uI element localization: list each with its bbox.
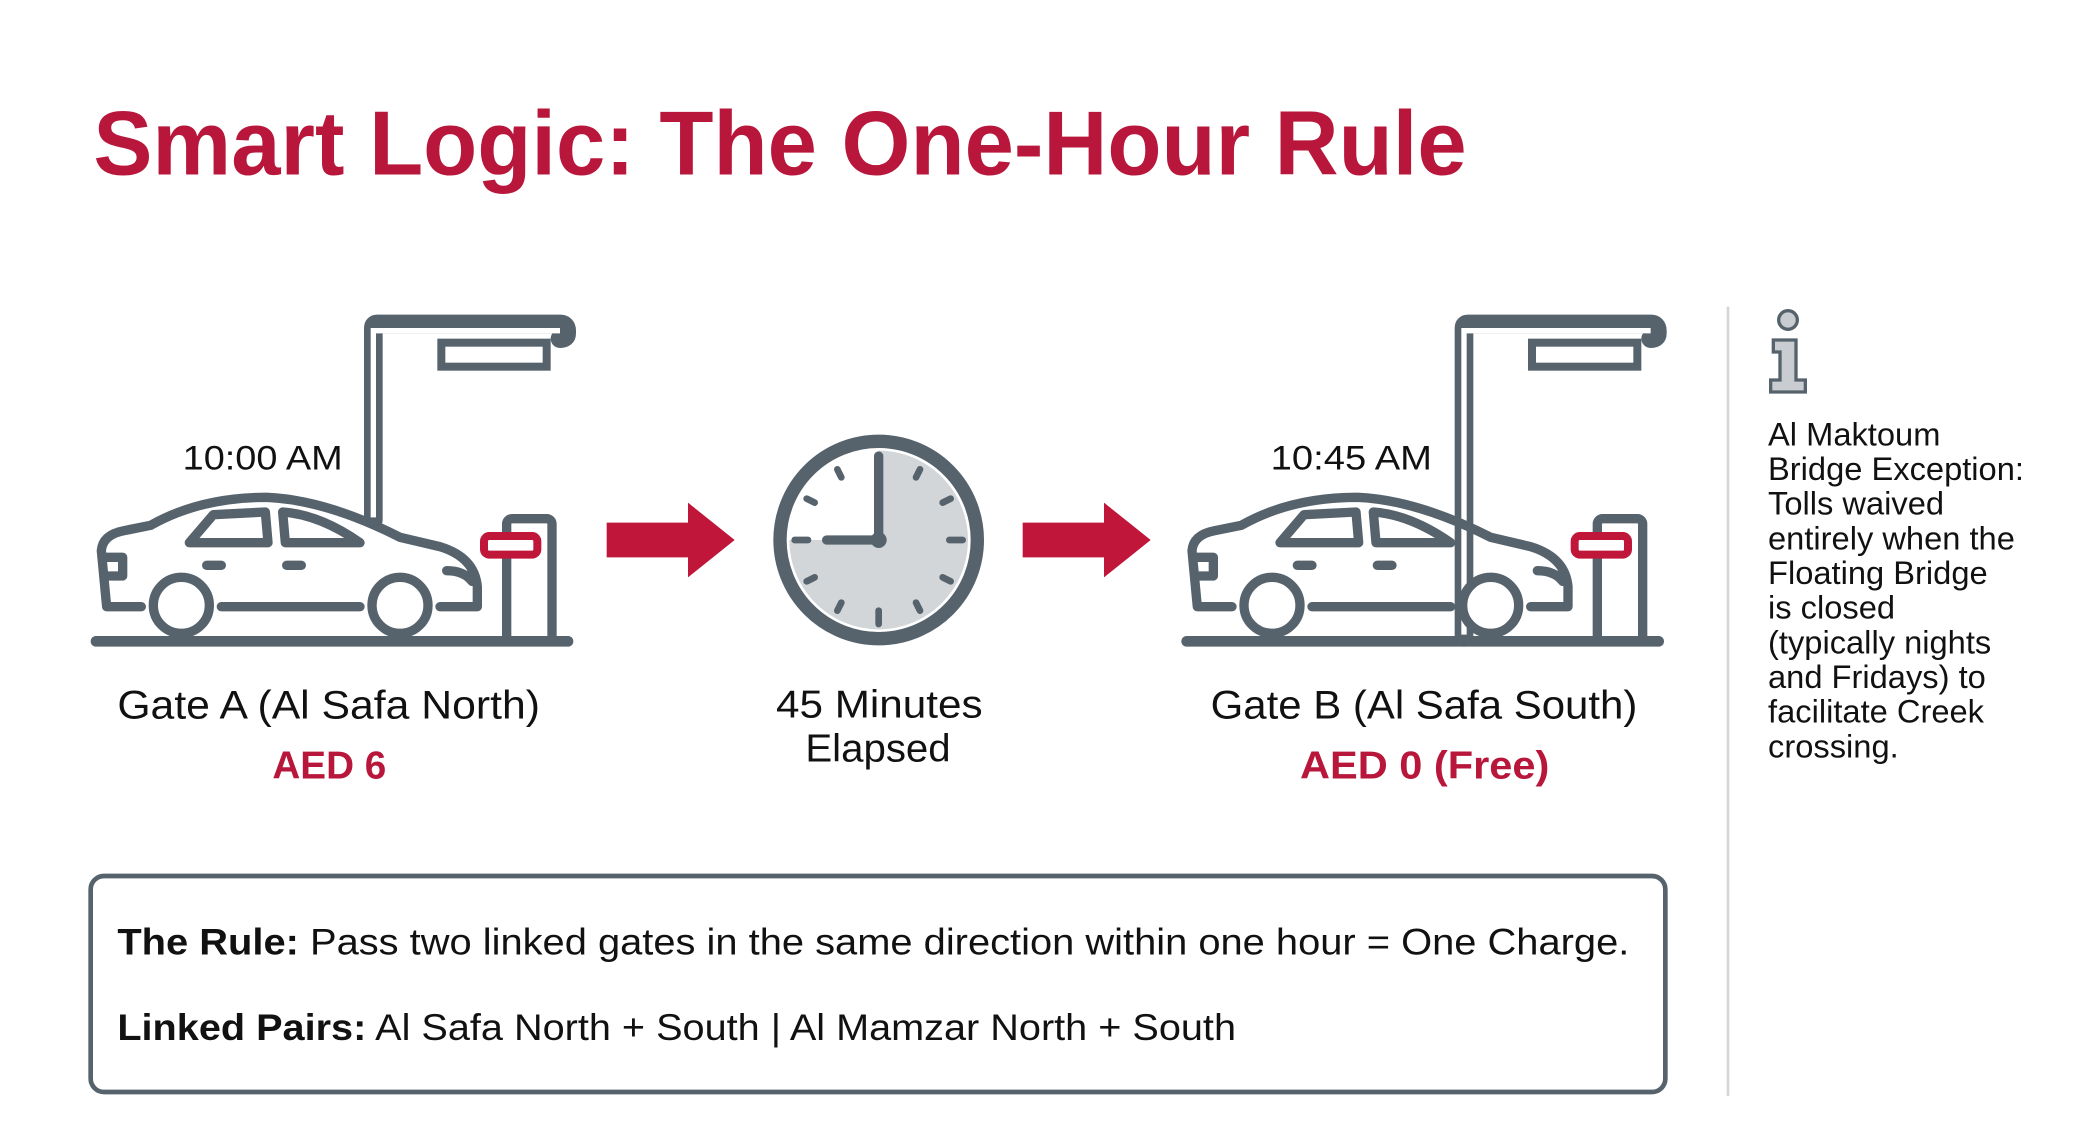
icon: gantry A	[96, 324, 568, 641]
panel: gate A	[96, 324, 568, 788]
arrow 2	[1023, 503, 1151, 577]
clock label: 45 Minutes	[776, 683, 983, 726]
icon: gantry B	[1187, 324, 1659, 641]
info text: (typically nights	[1768, 623, 1991, 660]
info text: Tolls waived	[1768, 485, 1944, 522]
info text: Bridge Exception:	[1768, 450, 2024, 487]
panel: gate B	[1187, 324, 1659, 788]
info text: is closed	[1768, 589, 1895, 626]
icon: clock	[780, 441, 977, 639]
info text: Al Maktoum	[1768, 415, 1940, 452]
gate label A: Gate A (Al Safa North)	[117, 684, 540, 728]
icon: info	[1771, 311, 1805, 392]
clock label: Elapsed	[805, 727, 951, 770]
arrow 1	[607, 503, 735, 577]
info text: entirely when the	[1768, 519, 2015, 556]
panel: info note	[1768, 311, 2033, 764]
rule box	[91, 876, 1665, 1092]
time label A: 10:00 AM	[183, 439, 343, 477]
linked pairs text: Linked Pairs: Al Safa North + South | Al Mamzar North + South	[117, 1006, 1236, 1048]
gate label B: Gate B (Al Safa South)	[1211, 684, 1637, 728]
info text: facilitate Creek	[1768, 693, 1985, 730]
title: Smart Logic: The One-Hour Rule	[93, 94, 1467, 195]
price B: AED 0 (Free)	[1300, 745, 1549, 788]
info text: and Fridays) to	[1768, 658, 1986, 695]
info text: Floating Bridge	[1768, 554, 1988, 591]
info text: crossing.	[1768, 727, 1899, 764]
price A: AED 6	[272, 745, 386, 788]
rule text: The Rule: Pass two linked gates in the same direction within one hour = One Charge.	[117, 921, 1629, 963]
clock label	[776, 683, 983, 770]
icon: car A	[101, 497, 477, 633]
icon: car B	[1192, 497, 1568, 633]
panel: clock	[776, 441, 983, 770]
time label B: 10:45 AM	[1271, 439, 1432, 477]
